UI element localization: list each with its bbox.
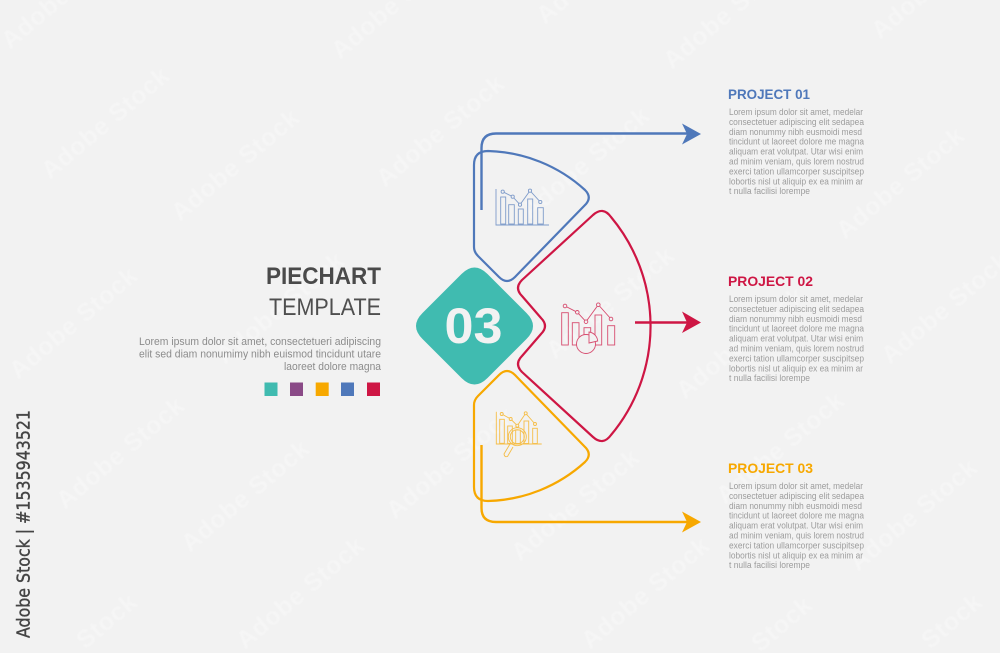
project 01 text block: tincidunt ut laoreet dolore me magna <box>729 137 864 147</box>
background watermarks: Stock <box>71 588 143 653</box>
title: TEMPLATE <box>269 294 381 321</box>
project 02 text block: t nulla facilisi lorempe <box>729 373 810 383</box>
colour swatches <box>264 382 380 396</box>
background watermarks: Adobe Stock <box>831 121 970 245</box>
project 01 text block: exerci tation ullamcorper suscipitsep <box>729 166 864 176</box>
arrow: blue <box>482 124 701 210</box>
project 02 text block: tincidunt ut laoreet dolore me magna <box>729 324 864 334</box>
intro text block: laoreet dolore magna <box>284 361 382 373</box>
project 03 text block: consectetuer adipiscing elit sedapea <box>729 491 864 501</box>
icon: blue bar chart <box>496 189 549 225</box>
project 03 text block: aliquam erat volutpat. Utar wisi enim <box>729 521 863 531</box>
title: PIECHART <box>266 263 381 290</box>
orange segment <box>474 371 589 501</box>
project 03 text block: t nulla facilisi lorempe <box>729 560 810 570</box>
project 03 text block <box>728 460 864 570</box>
project 01 text block: ad minim veniam, quis lorem nostrud <box>729 156 864 166</box>
icon: orange chart with magnifier <box>496 412 542 457</box>
background watermarks: Adobe Stock <box>671 281 810 405</box>
red segment <box>518 211 651 441</box>
project 02 text block: PROJECT 02 <box>728 273 813 289</box>
project 01 text block: lobortis nisl ut aliquip ex ea minim ar <box>729 176 863 186</box>
background watermarks: Adobe Stock <box>4 261 143 385</box>
project 02 text block: aliquam erat volutpat. Utar wisi enim <box>729 334 863 344</box>
background watermarks: Adobe Stock <box>36 61 175 185</box>
background watermarks: Adobe Stock <box>711 386 850 510</box>
project 03 text block: Lorem ipsum dolor sit amet, medelar <box>729 481 863 491</box>
centre diamond badge: 03 <box>444 298 502 354</box>
stock credit: Adobe Stock | #1535943521 <box>14 410 34 638</box>
blue segment <box>474 151 589 281</box>
project 01 text block: consectetuer adipiscing elit sedapea <box>729 117 864 127</box>
project 03 text block: PROJECT 03 <box>728 460 813 476</box>
background watermarks: Adobe Stock <box>506 443 645 567</box>
intro text block: elit sed diam nonumimy nibh euismod tincidunt utare <box>139 348 381 360</box>
project 01 text block: aliquam erat volutpat. Utar wisi enim <box>729 147 863 157</box>
project 03 text block: lobortis nisl ut aliquip ex ea minim ar <box>729 550 863 560</box>
intro text block <box>139 336 382 373</box>
project 02 text block: consectetuer adipiscing elit sedapea <box>729 304 864 314</box>
project 01 text block: PROJECT 01 <box>728 86 810 102</box>
background watermarks: Adobe Stock <box>211 246 350 370</box>
background watermarks: Adobe Stock <box>371 69 510 193</box>
background watermarks: Adobe Stock <box>51 391 190 515</box>
title <box>266 263 381 321</box>
background watermarks: Adobe Stock <box>576 531 715 653</box>
project 03 text block: tincidunt ut laoreet dolore me magna <box>729 511 864 521</box>
background watermarks: Adobe Stock <box>516 101 655 225</box>
project 03 text block: ad minim veniam, quis lorem nostrud <box>729 530 864 540</box>
arrow: orange <box>482 445 701 532</box>
project 02 text block <box>728 273 864 383</box>
project 02 text block: Lorem ipsum dolor sit amet, medelar <box>729 294 863 304</box>
project 02 text block: ad minim veniam, quis lorem nostrud <box>729 344 864 354</box>
project 02 text block: exerci tation ullamcorper suscipitsep <box>729 353 864 363</box>
arrow: red <box>635 312 701 333</box>
centre diamond badge <box>416 268 533 384</box>
background watermarks: Adobe Stock <box>166 103 305 227</box>
intro text block: Lorem ipsum dolor sit amet, consectetueri adipiscing <box>139 336 381 348</box>
background watermarks: Adobe Stock <box>844 453 983 577</box>
project 01 text block <box>728 86 864 196</box>
project 01 text block: t nulla facilisi lorempe <box>729 186 810 196</box>
background watermarks: Stock <box>916 588 988 653</box>
icon: red chart with pie <box>562 303 615 354</box>
project 02 text block: lobortis nisl ut aliquip ex ea minim ar <box>729 363 863 373</box>
project 01 text block: diam nonummy nibh eusmoidi mesd <box>729 127 862 137</box>
project 01 text block: Lorem ipsum dolor sit amet, medelar <box>729 107 863 117</box>
project 03 text block: exerci tation ullamcorper suscipitsep <box>729 540 864 550</box>
background watermarks: Adobe Stock <box>381 401 520 525</box>
project 02 text block: diam nonummy nibh eusmoidi mesd <box>729 314 862 324</box>
background watermarks: Adobe Stock <box>176 434 315 558</box>
background watermarks: Adobe Stock <box>541 241 680 365</box>
project 03 text block: diam nonummy nibh eusmoidi mesd <box>729 501 862 511</box>
background watermarks: Adobe Stock <box>231 531 370 653</box>
